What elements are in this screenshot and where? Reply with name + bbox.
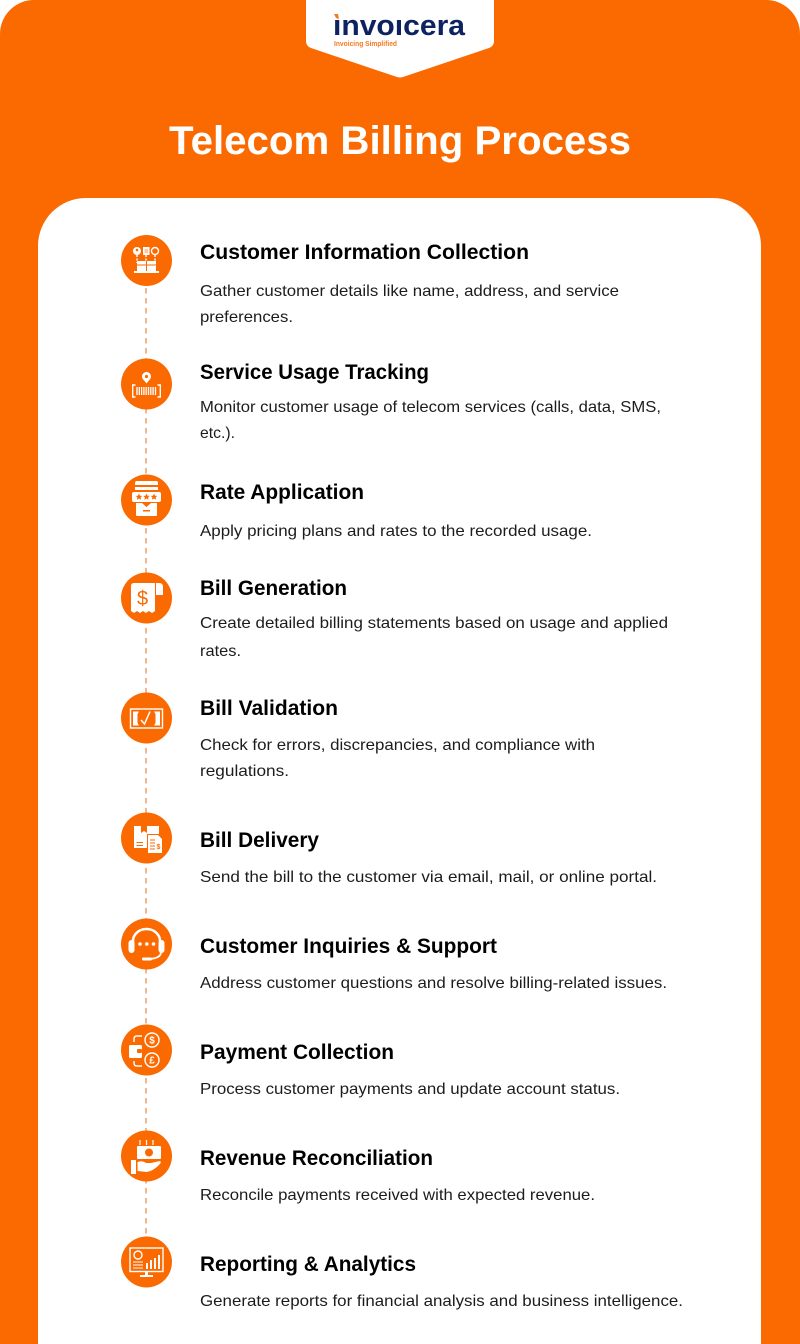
icon: parcel and invoice <box>121 812 172 864</box>
logo tagline: Invoicing Simplified <box>334 39 397 48</box>
step 3: rate application <box>121 474 592 540</box>
logo wordmark: ınvoıcera <box>333 10 466 42</box>
icon: analytics monitor <box>121 1236 172 1288</box>
description: Gather customer details like name, address, and service <box>200 283 619 300</box>
icon: parcel and invoice: $ <box>157 844 161 851</box>
title: Telecom Billing Process <box>169 119 631 163</box>
description: Check for errors, discrepancies, and compliance with <box>200 737 595 754</box>
heading: Customer Inquiries & Support <box>200 935 497 958</box>
description: Process customer payments and update account status. <box>200 1081 620 1098</box>
step 2: service usage tracking <box>121 358 661 442</box>
description: regulations. <box>200 763 289 780</box>
icon: rating box <box>121 474 172 526</box>
heading: Bill Validation <box>200 697 338 720</box>
step 5: bill validation <box>121 692 595 780</box>
heading: Bill Delivery <box>200 829 319 852</box>
step 1: customer information collection <box>121 235 619 326</box>
heading: Rate Application <box>200 481 364 504</box>
step 9: revenue reconciliation <box>121 1130 595 1204</box>
logo badge <box>306 0 494 78</box>
heading: Customer Information Collection <box>200 241 529 264</box>
icon: location barcode <box>121 358 172 410</box>
icon: headset <box>121 918 172 970</box>
icon: validated banknote <box>121 692 172 744</box>
description: preferences. <box>200 309 293 326</box>
logo accent <box>334 14 339 19</box>
step 7: customer inquiries and support <box>121 918 667 992</box>
icon: money over hand <box>121 1130 172 1182</box>
description: Apply pricing plans and rates to the recorded usage. <box>200 523 592 540</box>
description: Reconcile payments received with expected revenue. <box>200 1187 595 1204</box>
icon: wallet and coins: £ <box>149 1056 155 1066</box>
description: Address customer questions and resolve billing-related issues. <box>200 975 667 992</box>
step 10: reporting and analytics <box>121 1236 683 1310</box>
description: rates. <box>200 643 241 660</box>
heading: Reporting & Analytics <box>200 1253 416 1276</box>
step 4: bill generation <box>121 572 668 660</box>
icon: receipt <box>121 572 172 624</box>
white content panel <box>38 198 761 1344</box>
dashed timeline connector <box>145 288 147 1238</box>
heading: Payment Collection <box>200 1041 394 1064</box>
description: Generate reports for financial analysis and business intelligence. <box>200 1293 683 1310</box>
description: Create detailed billing statements based on usage and applied <box>200 615 668 632</box>
heading: Bill Generation <box>200 577 347 600</box>
step 6: bill delivery <box>121 812 657 886</box>
description: etc.). <box>200 425 235 442</box>
icon: wallet and coins: $ <box>149 1036 155 1046</box>
description: Monitor customer usage of telecom services (calls, data, SMS, <box>200 399 661 416</box>
icon: customer data <box>121 235 172 286</box>
step 8: payment collection <box>121 1024 620 1098</box>
icon: wallet and coins <box>121 1024 172 1076</box>
heading: Revenue Reconciliation <box>200 1147 433 1170</box>
description: Send the bill to the customer via email, mail, or online portal. <box>200 869 657 886</box>
heading: Service Usage Tracking <box>200 361 429 384</box>
icon: receipt: $ <box>137 588 148 610</box>
